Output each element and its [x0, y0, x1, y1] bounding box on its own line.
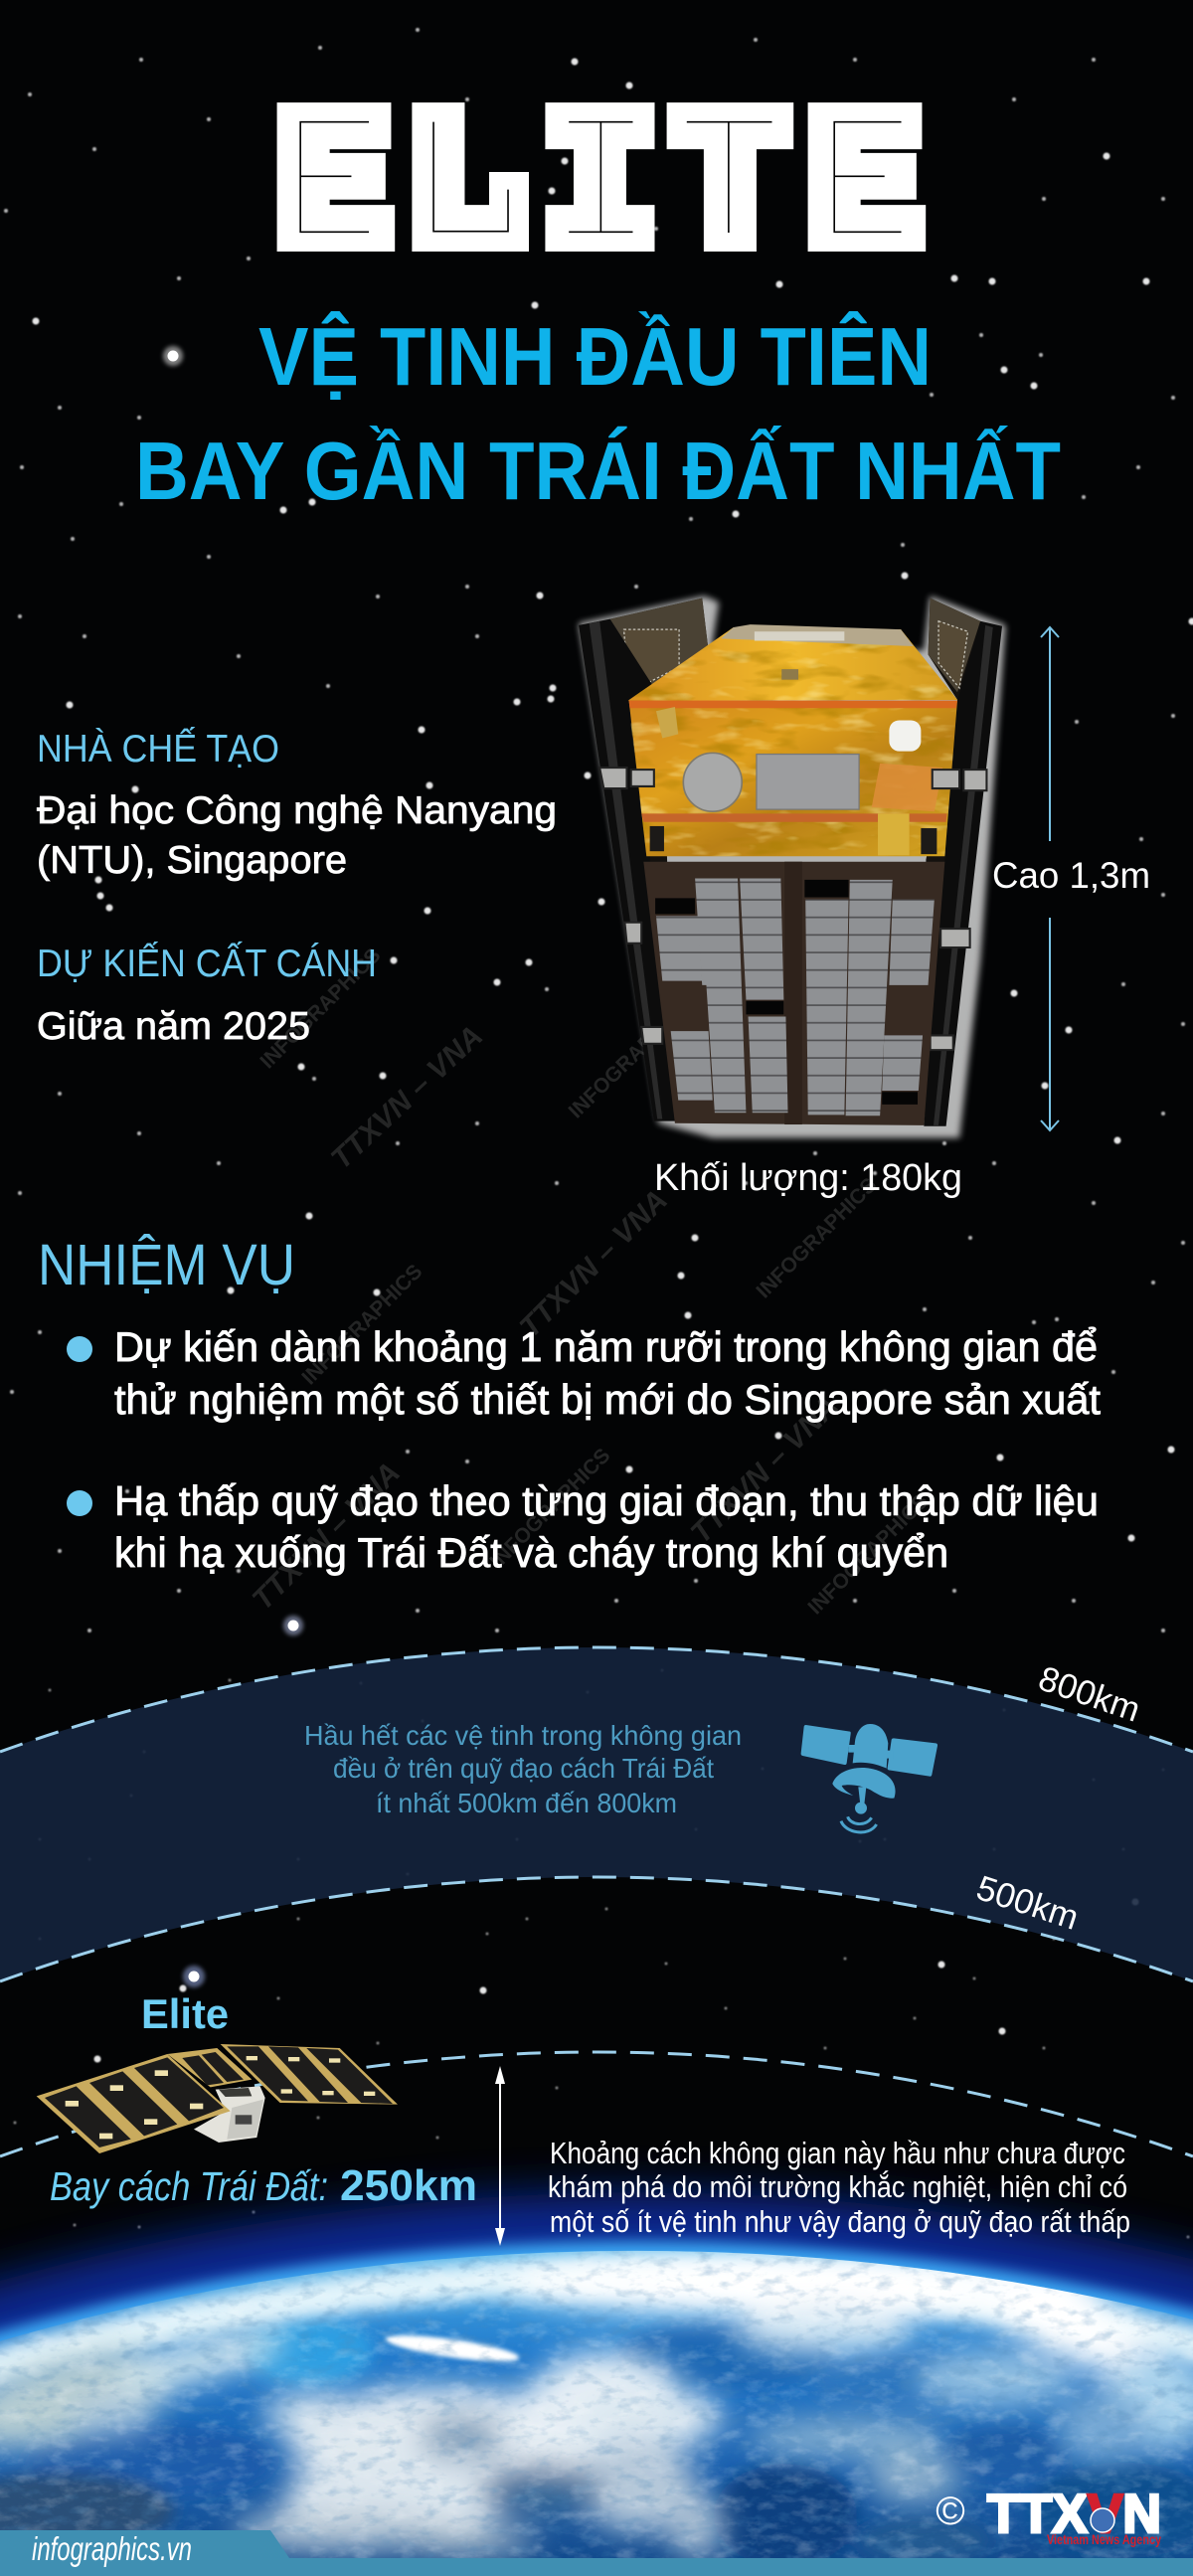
subtitle: [135, 310, 1061, 517]
subtitle: VỆ TINH ĐẦU TIÊN: [258, 310, 932, 403]
watermarks: TTXVN – VNA: [325, 1019, 489, 1176]
dark backing: [610, 599, 980, 1125]
watermarks: TTXVN – VNA: [514, 1184, 674, 1344]
right wing: [221, 2044, 398, 2105]
watermarks: INFOGRAPHICS: [256, 944, 385, 1073]
logo: TTXVN: TTXVN: [987, 2483, 1161, 2544]
watermarks: INFOGRAPHICS: [752, 1173, 881, 1302]
earth atmosphere glow: [0, 2192, 1193, 2576]
orbit line 250 km: [0, 2052, 1193, 2156]
label: flight altitude: Bay cách Trái Đất:: [50, 2163, 328, 2209]
solar cells: [656, 879, 935, 1116]
bullet 1: [67, 1336, 92, 1362]
height arrow: [1041, 627, 1059, 1130]
watermarks: TTXVN – VNA: [685, 1390, 845, 1550]
label: flight altitude: 250km: [340, 2161, 477, 2210]
left rail: [579, 619, 677, 1121]
weight label: Khối lượng: 180kg: [654, 1157, 962, 1199]
mission list: Dự kiến dành khoảng 1 năm rưỡi trong không gian để: [114, 1323, 1098, 1370]
band note: ít nhất 500km đến 800km: [376, 1788, 677, 1818]
bullet 2: [67, 1490, 92, 1516]
band note: đều ở trên quỹ đạo cách Trái Đất: [333, 1753, 714, 1784]
orbit band 500–800 km: [0, 1647, 1193, 1981]
mission list: [67, 1323, 1101, 1576]
satellite photo: [579, 596, 1005, 1138]
mission list: khi hạ xuống Trái Đất và cháy trong khí quyển: [114, 1529, 948, 1576]
watermarks: INFOGRAPHICS: [565, 995, 695, 1123]
band note: [304, 1720, 742, 1818]
orbit line 800 km: [0, 1647, 1193, 1752]
cloud texture: [0, 2237, 1193, 2576]
watermarks: INFOGRAPHICS: [297, 1260, 426, 1389]
watermarks: [247, 944, 933, 1619]
right rail: [924, 621, 1002, 1126]
height label: Cao 1,3m: [992, 855, 1150, 896]
info: manufacturer and launch: Đại học Công nghệ Nanyang: [37, 789, 557, 832]
logo: TTXVN: Vietnam News Agency: [1047, 2531, 1161, 2547]
cell markers: [66, 2056, 375, 2139]
watermarks: INFOGRAPHICS: [485, 1444, 614, 1573]
clouds: [0, 2276, 1193, 2385]
small satellite Elite: [37, 2044, 398, 2153]
body: [194, 2086, 265, 2143]
subtitle: BAY GẦN TRÁI ĐẤT NHẤT: [135, 424, 1061, 517]
watermarks: INFOGRAPHICS: [803, 1489, 933, 1619]
footer tab and bar: [0, 2530, 1193, 2576]
footer site name: infographics.vn: [32, 2530, 192, 2567]
instruments on gold face: [683, 753, 742, 811]
satellite glow outline: [579, 596, 1005, 1138]
gold top: [628, 627, 957, 701]
heading: mission: NHIỆM VỤ: [38, 1233, 295, 1297]
distance arrow 250km: [495, 2066, 505, 2246]
icon: satellite: [801, 1724, 937, 1832]
deep ocean: [0, 2317, 1193, 2567]
logo: TTXVN: ©: [936, 2490, 965, 2533]
label: Elite: Elite: [141, 1990, 229, 2037]
brackets: [599, 768, 986, 1050]
info: manufacturer and launch: [37, 727, 557, 1048]
label 500km: 500km: [972, 1868, 1084, 1938]
top wing section: [167, 2048, 252, 2087]
earth: [0, 2237, 1193, 2576]
orbit line 500 km: [0, 1877, 1193, 1981]
label 800km: 800km: [1034, 1659, 1145, 1730]
title: ELITE: [277, 84, 921, 295]
left wing: [37, 2054, 231, 2153]
mission list: Hạ thấp quỹ đạo theo từng giai đoạn, thu thập dữ liệu: [114, 1477, 1099, 1524]
band note: Hầu hết các vệ tinh trong không gian: [304, 1720, 742, 1751]
info: manufacturer and launch: (NTU), Singapore: [37, 839, 347, 882]
note: low orbit: [548, 2136, 1130, 2239]
info: manufacturer and launch: NHÀ CHẾ TẠO: [37, 727, 279, 771]
mission list: thử nghiệm một số thiết bị mới do Singapore sản xuất: [114, 1376, 1101, 1423]
info: manufacturer and launch: Giữa năm 2025: [37, 1005, 310, 1048]
info: manufacturer and launch: DỰ KIẾN CẤT CÁNH: [37, 942, 377, 985]
lower brown panel: [643, 862, 944, 1125]
watermarks: TTXVN – VNA: [247, 1457, 407, 1617]
gold front: [629, 701, 957, 856]
